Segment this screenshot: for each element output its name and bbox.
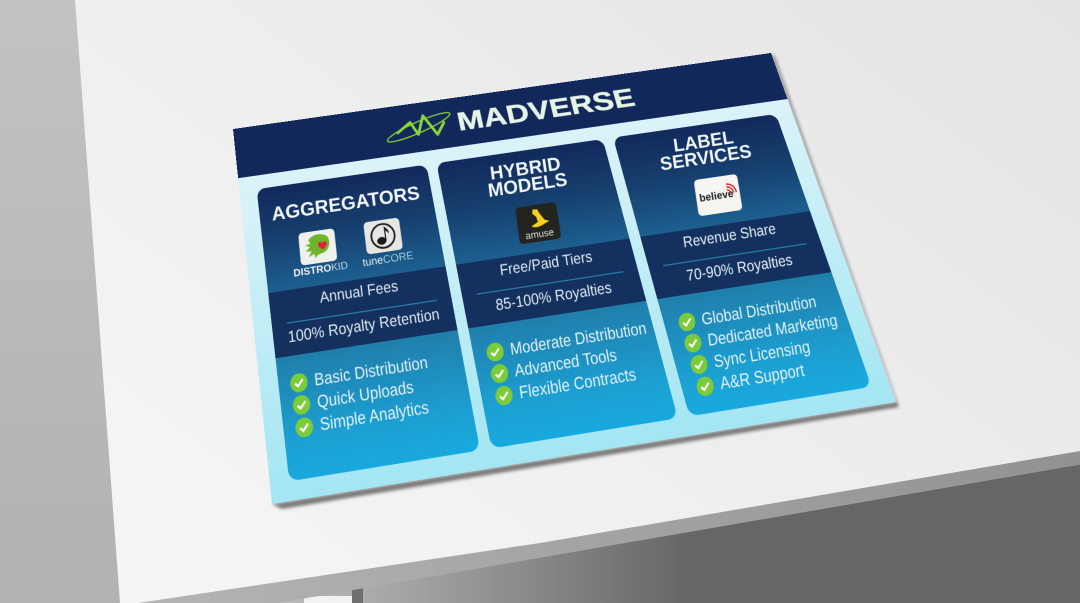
label: TuneCore: tuneCORE <box>362 249 414 269</box>
royalty text: 70-90% Royalties <box>685 251 794 285</box>
pricing band <box>268 266 458 358</box>
royalty text: 100% Royalty Retention <box>287 305 441 346</box>
icon: Amuse <box>515 202 561 245</box>
feature: advanced tools: Advanced Tools <box>514 346 618 381</box>
royalty text: 85-100% Royalties <box>494 279 613 314</box>
feature: flexible contracts: Flexible Contracts <box>518 365 638 403</box>
heading: SERVICES <box>659 140 753 174</box>
panel: hybrid models <box>436 139 678 448</box>
pricing text: Annual Fees <box>319 277 399 307</box>
pricing text: Revenue Share <box>682 220 777 251</box>
feature: simple analytics: Simple Analytics <box>319 398 430 435</box>
underside shadow region <box>278 464 1080 603</box>
icon: Believe: believe <box>694 183 712 198</box>
header banner <box>233 53 787 178</box>
panel: label services <box>613 114 872 416</box>
feature: basic distribution: Basic Distribution <box>313 353 429 390</box>
heading <box>487 153 569 201</box>
icon: Madverse logo wave <box>386 112 451 143</box>
icon: TuneCore <box>363 217 403 255</box>
feature: sync licensing: Sync Licensing <box>713 338 812 371</box>
heading: HYBRID <box>489 153 562 184</box>
poster shadow <box>272 53 899 509</box>
heading: MODELS <box>487 168 569 201</box>
table leg <box>304 588 363 603</box>
brand name: MADVERSE <box>454 84 638 137</box>
feature: dedicated marketing: Dedicated Marketing <box>706 311 839 350</box>
pricing band <box>456 238 646 328</box>
icon: DistroKid <box>298 228 337 266</box>
panel: aggregators <box>257 165 480 481</box>
heading: LABEL <box>672 127 735 156</box>
pricing band <box>640 211 831 299</box>
feature: moderate distribution: Moderate Distribution <box>509 319 648 359</box>
icon: Believe <box>694 174 743 216</box>
table front edge <box>138 451 1080 603</box>
label: DistroKid: DISTROKID <box>293 259 349 279</box>
heading: AGGREGATORS <box>271 182 421 225</box>
feature: global distribution: Global Distribution <box>700 293 818 329</box>
feature: A&R support: A&R Support <box>719 361 806 393</box>
poster: Madverse comparison sheet <box>233 53 896 504</box>
icon: Amuse: amuse <box>515 216 529 230</box>
pricing text: Free/Paid Tiers <box>499 248 593 279</box>
feature: quick uploads: Quick Uploads <box>316 378 415 412</box>
